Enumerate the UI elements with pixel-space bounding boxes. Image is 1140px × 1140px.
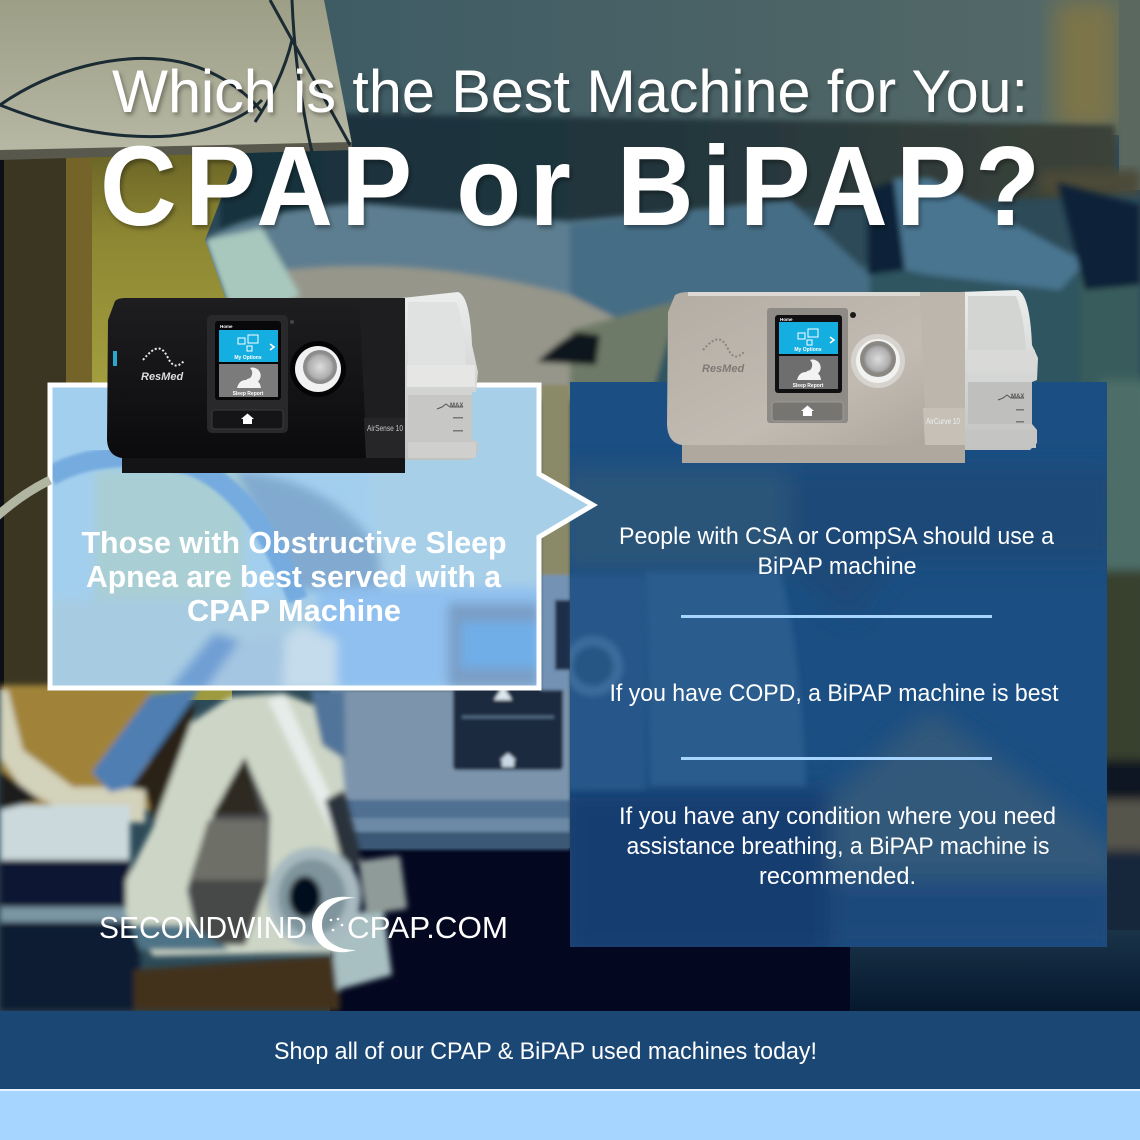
machine: silver BiPAP: My Options — [794, 347, 822, 353]
left hose on background — [0, 480, 50, 518]
text: breathing assistance: If you have any condition where you need — [619, 803, 1056, 830]
machine: silver BiPAP: ResMed — [702, 363, 744, 375]
logo: SecondWindCPAP.com: CPAP.COM — [347, 910, 508, 945]
text: shop call to action: Shop all of our CPAP & BiPAP used machines today! — [274, 1038, 817, 1065]
panel: conditions suited to BiPAP — [560, 382, 1120, 960]
machine: black CPAP: AirSense 10 — [367, 423, 403, 433]
text: obstructive sleep apnea: Apnea are best served with a — [86, 559, 502, 594]
text: CSA or CompSA: People with CSA or CompSA should use a — [619, 523, 1055, 550]
title: CPAP or BiPAP? — [100, 124, 1040, 250]
machine: black CPAP: ResMed — [141, 371, 183, 383]
ghost machine — [330, 385, 570, 850]
machine: silver BiPAP: Sleep Report — [793, 383, 824, 389]
text: obstructive sleep apnea: Those with Obstructive Sleep — [82, 525, 506, 560]
machine: silver BiPAP: AirCurve 10 — [926, 416, 960, 426]
callout photo tints — [52, 450, 536, 686]
text: ResMed logo — [143, 348, 184, 366]
logo: SecondWindCPAP.com: SECONDWIND — [99, 910, 307, 945]
text: breathing assistance: recommended. — [759, 863, 916, 890]
machine: silver BiPAP: MAX — [1011, 394, 1024, 400]
machine: black CPAP — [107, 292, 478, 473]
mask — [0, 685, 408, 1011]
bed and pillows — [205, 178, 1140, 420]
text: CSA or CompSA: BiPAP machine — [758, 553, 916, 580]
title: Which is the Best Machine for You: — [112, 58, 1028, 125]
panel background tints — [560, 470, 1120, 960]
bedside wall — [0, 150, 240, 700]
text: COPD: If you have COPD, a BiPAP machine is best — [610, 680, 1059, 707]
text: ResMed logo silver — [703, 339, 744, 357]
title — [100, 58, 1040, 250]
lampshade with pattern — [0, 0, 352, 160]
text: breathing assistance: assistance breathing, a BiPAP machine is — [626, 833, 1050, 860]
bottom dark area — [330, 848, 1140, 1011]
right edge — [1100, 380, 1140, 950]
panel: CPAP callout with arrow — [50, 385, 600, 690]
footer band — [0, 1011, 1140, 1140]
logo: SecondWindCPAP.com — [99, 897, 508, 952]
machine: silver BiPAP: Home — [780, 317, 793, 322]
machine: black CPAP: My Options — [234, 355, 262, 361]
machine: silver BiPAP — [667, 290, 1038, 463]
machine: black CPAP: Sleep Report — [233, 391, 264, 397]
icon: crescent moon and stars — [312, 897, 356, 952]
text: obstructive sleep apnea: CPAP Machine — [187, 593, 401, 628]
machine: black CPAP: MAX — [450, 403, 463, 409]
machine: black CPAP: Home — [220, 324, 233, 329]
